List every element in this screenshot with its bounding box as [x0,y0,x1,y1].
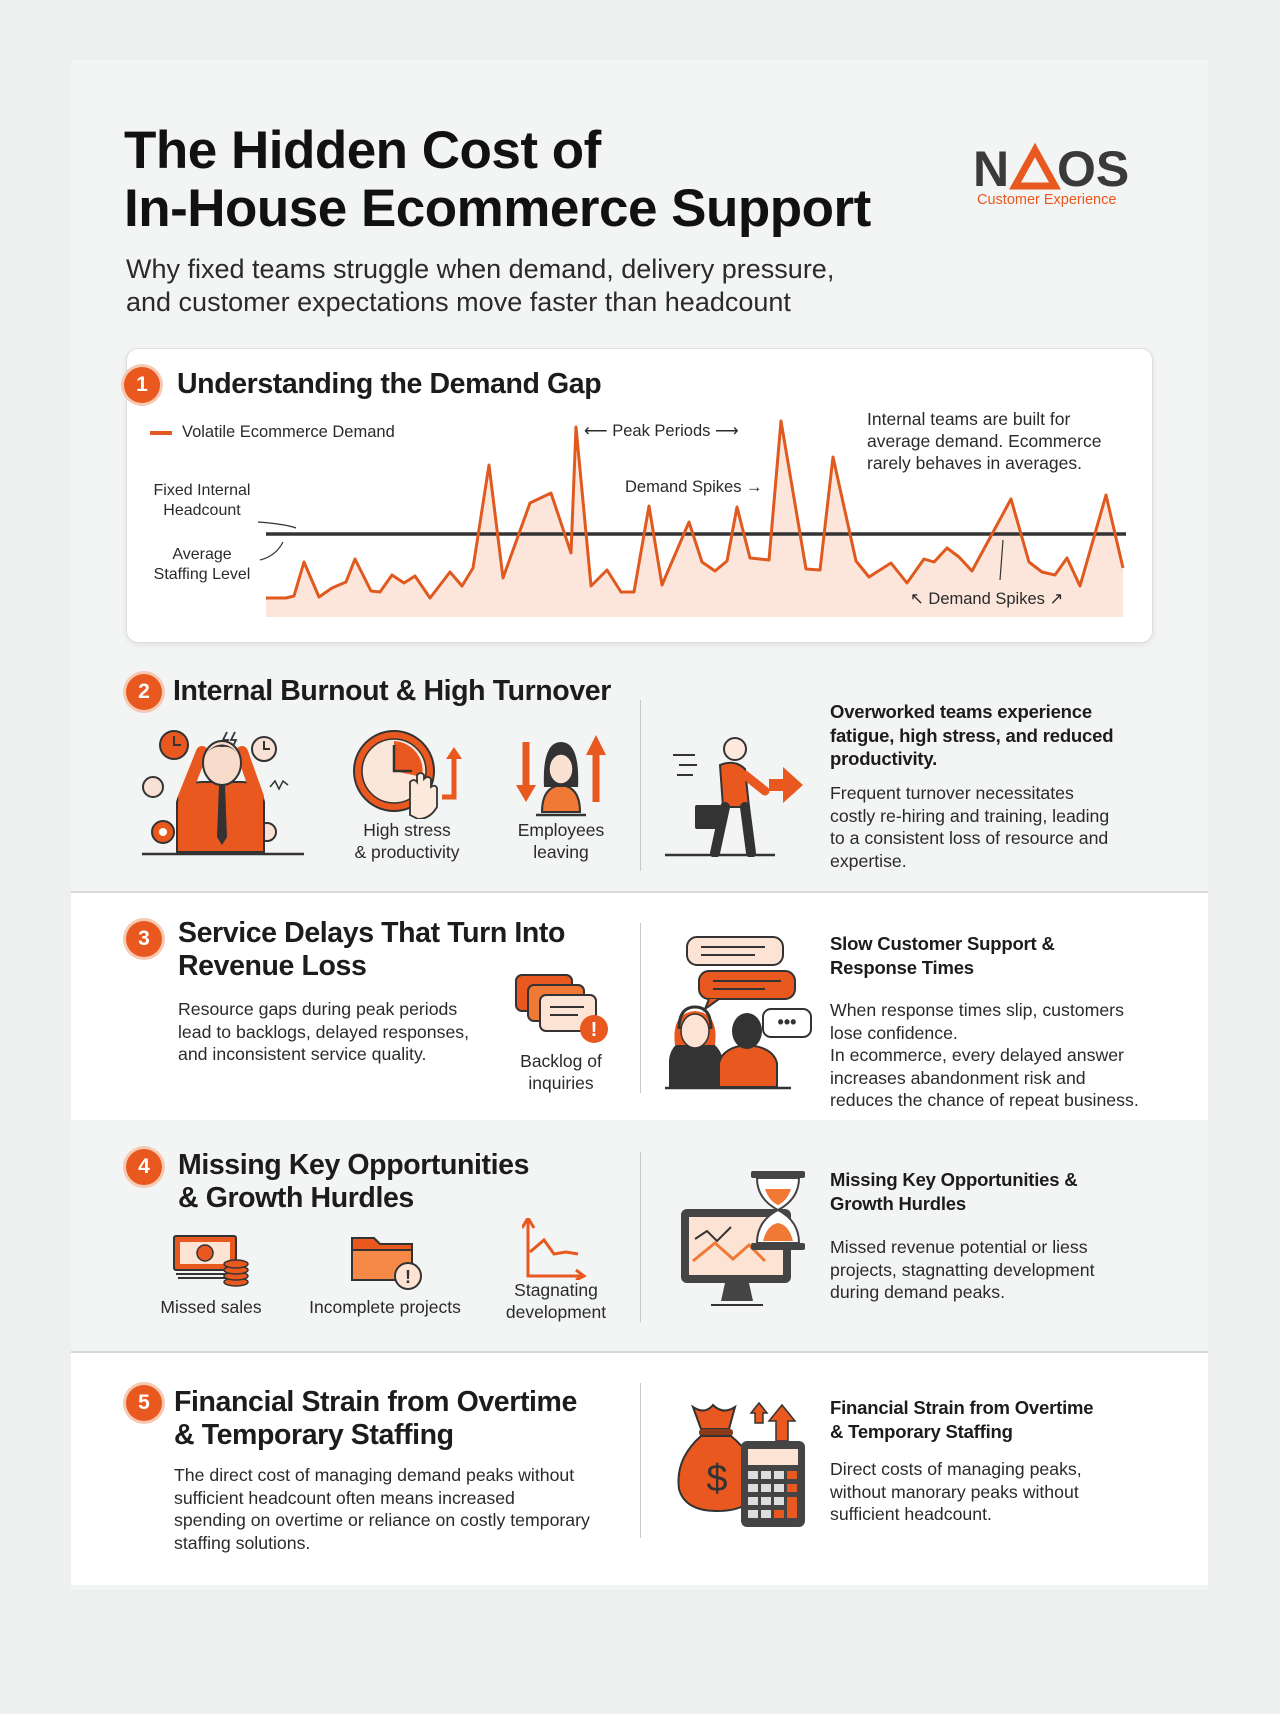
label: stagnating development: development [506,1302,606,1322]
text: overworked teams: productivity. [830,748,937,769]
badge 2 [126,674,162,710]
icon: backlog of inquiries: ! [591,1019,597,1041]
badge 4: 4 [138,1155,150,1178]
title [124,121,871,238]
text: resource gaps [178,999,469,1064]
label: employees leaving [518,820,604,862]
badge 1 [124,367,160,403]
badge 4 [126,1149,162,1185]
callout text [867,409,1101,473]
icon: support agents with chat bubbles: ••• [778,1012,796,1032]
label: peak periods: ⟵ Peak Periods ⟶ [584,422,739,440]
panel 1: demand gap [126,348,1153,643]
divider [640,923,641,1093]
label: backlog: Backlog of [520,1051,602,1071]
heading 5 [174,1386,577,1451]
label: missed sales: Missed sales [160,1297,262,1317]
icon: monitor with hourglass [681,1171,805,1306]
text: direct cost [174,1465,590,1552]
text: missing key opportunities heading: Missing Key Opportunities & [830,1169,1077,1190]
text: resource gaps: lead to backlogs, delayed responses, [178,1022,469,1042]
label: average staffing level: Staffing Level [154,566,250,583]
heading 3: Revenue Loss [178,950,366,982]
text: direct cost: The direct cost of managing demand peaks without [174,1465,574,1485]
section 5: financial strain [71,1351,1208,1585]
icon: money bag and calculator [677,1402,805,1527]
text: resource gaps: Resource gaps during peak periods [178,999,457,1019]
text: direct costs: Direct costs of managing peaks, [830,1459,1082,1479]
icon: walking away [665,737,803,857]
icon: money bag and calculator: $ [706,1458,728,1500]
label: backlog [520,1051,602,1093]
section 4: missing opportunities [123,1146,1094,1322]
text: overworked teams: Overworked teams experience [830,701,1092,722]
label: high stress: & productivity [354,842,460,862]
icon: employees leaving [516,735,606,816]
title: The Hidden Cost of [124,121,601,180]
callout text: Internal teams are built for [867,409,1070,429]
text: missing key opportunities heading [830,1169,1078,1214]
text: overworked teams [830,701,1113,769]
heading 4: & Growth Hurdles [178,1182,414,1214]
text: direct costs [830,1459,1082,1524]
badge 3: 3 [138,927,150,950]
badge 2: 2 [138,680,150,703]
text: frequent turnover: expertise. [830,850,907,870]
section 2: burnout [123,671,1113,871]
subtitle [126,254,834,317]
icon: stressed worker [142,730,304,856]
label: demand spikes: Demand Spikes → [625,478,763,496]
text: direct cost: sufficient headcount often means increased [174,1488,515,1508]
label: high stress: High stress [363,820,451,840]
label: stagnating development: Stagnating [514,1280,598,1300]
text: frequent turnover: to a consistent loss of resource and [830,828,1108,848]
label: fixed internal headcount: Fixed Internal [154,482,250,499]
icon: stagnating chart [522,1218,587,1280]
heading 5: Financial Strain from Overtime [174,1386,577,1418]
label: backlog: inquiries [528,1073,594,1093]
page inner area [71,60,1208,1590]
badge 5 [126,1385,162,1421]
title: In-House Ecommerce Support [124,179,871,238]
text: resource gaps: and inconsistent service quality. [178,1044,426,1064]
text: financial strain heading: Financial Strain from Overtime [830,1397,1093,1418]
label: incomplete projects: Incomplete projects [309,1297,461,1317]
text: frequent turnover [830,783,1109,870]
badge 3 [126,921,162,957]
text: financial strain heading [830,1397,1093,1442]
icon: incomplete projects [351,1237,422,1290]
icon: support agents with chat bubbles [665,936,812,1090]
text: direct cost: staffing solutions. [174,1532,310,1552]
label: high stress [354,820,460,862]
logo: NAOS: OS [1057,141,1129,197]
heading 3 [178,917,565,982]
text: missed revenue [830,1237,1094,1302]
divider [640,700,641,871]
heading 3: Service Delays That Turn Into [178,917,565,949]
text: response times: In ecommerce, every delayed answer [830,1045,1124,1065]
section 3: service delays [71,891,1208,1120]
logo: NAOS: Customer Experience [977,192,1116,208]
heading 4 [178,1149,529,1214]
text: direct costs: without manorary peaks without [830,1482,1079,1502]
text: overworked teams: fatigue, high stress, and reduced [830,724,1113,746]
subtitle: Why fixed teams struggle when demand, delivery pressure, [126,254,834,284]
subtitle: and customer expectations move faster than headcount [126,287,791,317]
logo: NAOS [973,141,1129,208]
text: frequent turnover: costly re-hiring and training, leading [830,806,1109,826]
text: frequent turnover: Frequent turnover necessitates [830,783,1074,803]
text: financial strain heading: & Temporary Staffing [830,1420,1013,1442]
text: missing key opportunities heading: Growth Hurdles [830,1192,966,1214]
label: fixed internal headcount: Headcount [163,502,241,519]
icon: incomplete projects: ! [405,1267,411,1287]
icon: clock and hand [353,730,462,819]
text: missed revenue: during demand peaks. [830,1282,1005,1302]
callout text: rarely behaves in averages. [867,453,1082,473]
text: response times [830,1000,1139,1110]
text: response times: reduces the chance of repeat business. [830,1090,1139,1110]
divider [640,1152,641,1322]
text: slow customer support heading [830,933,1055,978]
label: employees leaving: leaving [533,842,589,862]
icon: backlog of inquiries [515,974,608,1043]
divider [640,1383,641,1538]
text: direct costs: sufficient headcount. [830,1504,992,1524]
badge 1: 1 [136,373,148,396]
text: slow customer support heading: Slow Customer Support & [830,933,1055,954]
label: demand spikes bottom: ↖ Demand Spikes ↗ [910,590,1063,608]
label: fixed internal headcount [154,482,250,519]
label: employees leaving: Employees [518,820,604,840]
text: missed revenue: Missed revenue potential or liess [830,1237,1088,1257]
label: stagnating development [506,1280,606,1322]
logo: NAOS: N [973,141,1009,197]
text: missed revenue: projects, stagnatting development [830,1260,1094,1280]
text: response times: When response times slip, customers [830,1000,1124,1020]
callout text: average demand. Ecommerce [867,431,1101,451]
text: response times: increases abandonment risk and [830,1068,1086,1088]
label: average staffing level [154,546,250,583]
text: response times: lose confidence. [830,1022,958,1042]
badge 5: 5 [138,1391,150,1414]
label: average staffing level: Average [172,546,232,563]
heading 2: Internal Burnout & High Turnover [173,675,611,707]
chart: volatile demand vs fixed headcount [150,409,1126,617]
icon: missed sales [173,1235,249,1287]
heading 4: Missing Key Opportunities [178,1149,529,1181]
text: slow customer support heading: Response Times [830,956,974,978]
heading 1: Understanding the Demand Gap [177,368,601,400]
heading 5: & Temporary Staffing [174,1419,454,1451]
text: direct cost: spending on overtime or reliance on costly temporary [174,1510,590,1530]
legend: Volatile Ecommerce Demand [182,423,395,441]
